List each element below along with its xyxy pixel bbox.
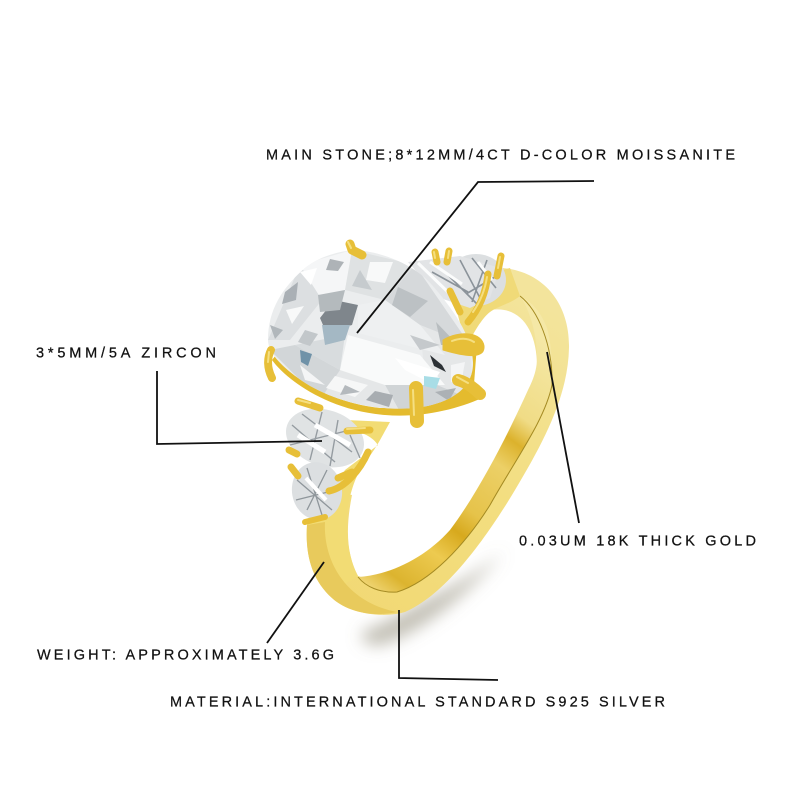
prong: upper right [450, 274, 488, 322]
band far inner surface [358, 296, 552, 592]
prong: right middle [443, 334, 484, 356]
ring infographic [36, 148, 756, 707]
stone facets [268, 250, 473, 412]
outer rim lower left [307, 522, 397, 614]
ring band [307, 268, 569, 615]
leader: material [399, 610, 498, 680]
prong: left [268, 350, 272, 378]
shoulder left [307, 420, 390, 590]
prong: top [350, 244, 362, 255]
label: weight: WEIGHT: APPROXIMATELY 3.6G [37, 648, 334, 664]
label: material: MATERIAL:INTERNATIONAL STANDARD S925 SILVER [170, 694, 665, 710]
prong highlights [268, 242, 500, 429]
stone: lower left round [287, 458, 347, 524]
prong: left oval prongs [289, 401, 320, 476]
leader: zircon [157, 371, 322, 444]
shadow under ring [362, 550, 505, 645]
prong: upper cluster [435, 251, 501, 276]
leader: main stone [357, 181, 594, 333]
prong: bottom [416, 388, 417, 421]
prong: bottom left [305, 517, 325, 522]
band silhouette outer surface [307, 268, 569, 615]
label: main stone: MAIN STONE;8*12MM/4CT D-COLOR MOISSANITE [266, 148, 735, 164]
prong: right oval prongs [329, 430, 370, 491]
upper right gold wedge [455, 268, 520, 345]
stone: right side pair [408, 254, 506, 308]
main pear stone [268, 250, 473, 409]
leader: gold [547, 352, 579, 523]
gold prongs [268, 244, 501, 522]
stone: lower left oval [278, 399, 372, 477]
gold bezel under main stone [272, 345, 482, 416]
groove line [358, 296, 552, 592]
prong: lower right [458, 380, 480, 394]
label: gold: 0.03UM 18K THICK GOLD [519, 534, 756, 550]
leader: weight [267, 562, 324, 643]
label: zircon: 3*5MM/5A ZIRCON [36, 346, 216, 362]
